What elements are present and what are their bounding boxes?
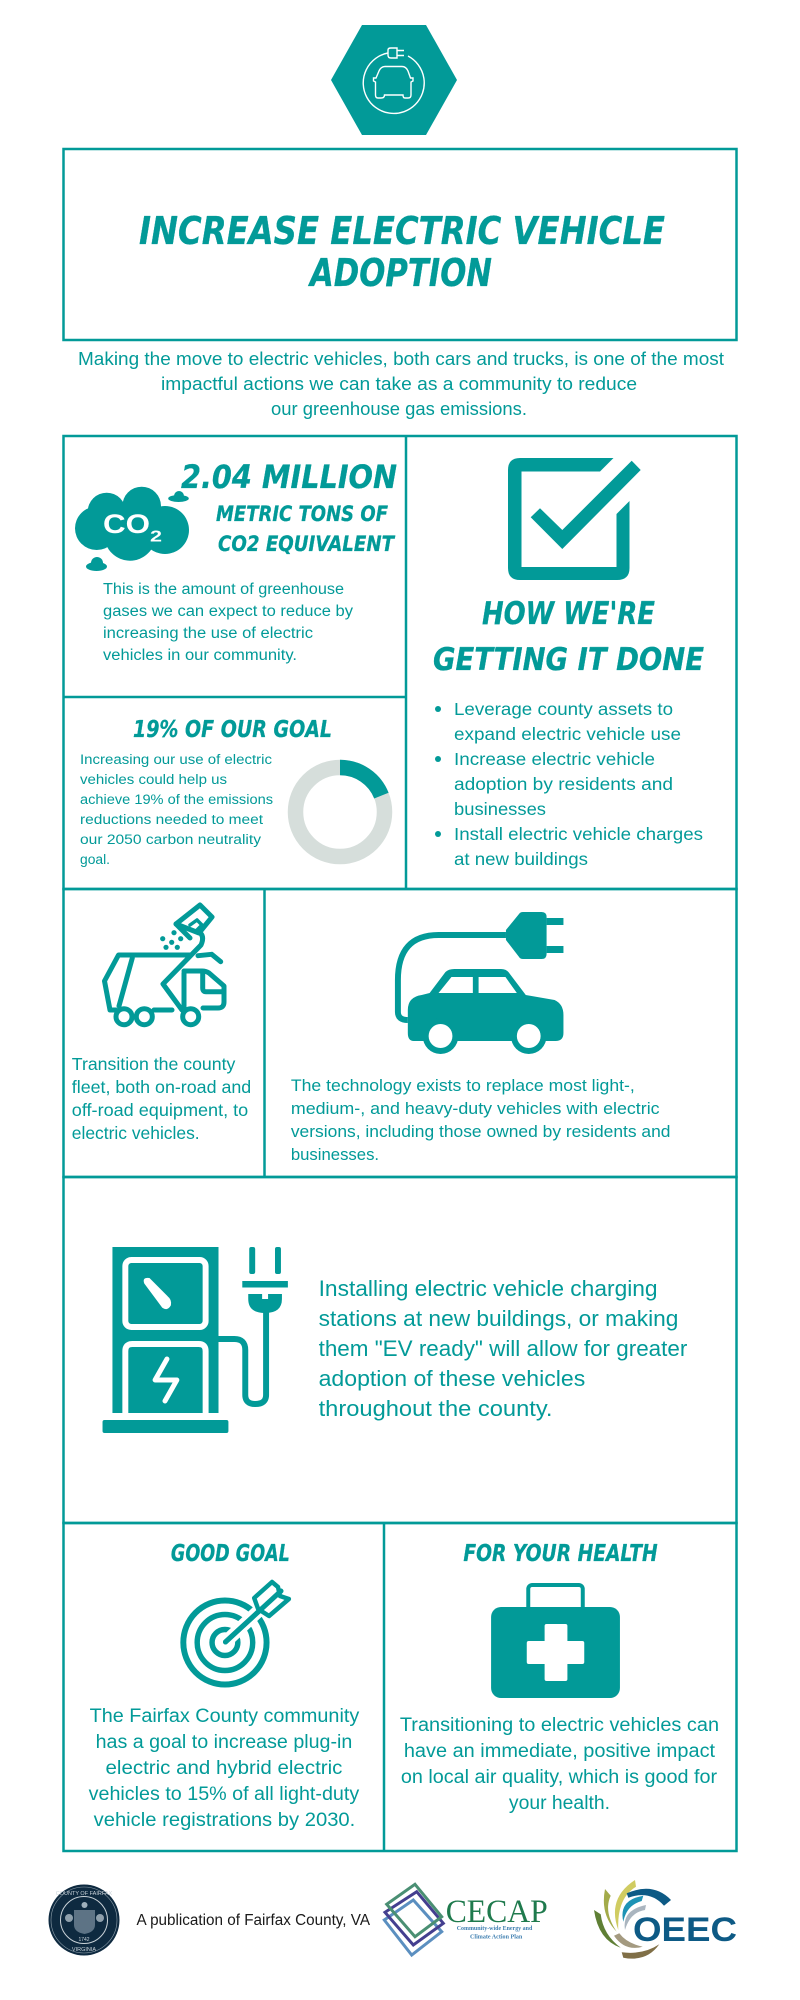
description: Transition the county <box>72 1054 236 1074</box>
icon: garbage truck <box>104 905 224 1025</box>
description: vehicles could help us <box>80 772 227 788</box>
title <box>139 209 665 295</box>
unit label <box>216 502 395 556</box>
logo: CECAP: Community-wide Energy and <box>457 1925 533 1932</box>
description <box>319 1276 688 1421</box>
footer logos <box>48 1880 737 1959</box>
description: have an immediate, positive impact <box>404 1740 716 1762</box>
description: increasing the use of electric <box>103 625 313 642</box>
logo: CECAP: Climate Action Plan <box>470 1933 523 1940</box>
unit label: METRIC TONS OF <box>216 502 389 526</box>
icon: charging station <box>103 1247 288 1433</box>
icon: hexagon with electric car <box>331 25 457 135</box>
icon: CO2 cloud: 2 <box>150 528 162 546</box>
big number: 2.04 MILLION <box>181 458 397 496</box>
description: adoption of these vehicles <box>319 1366 585 1391</box>
bullet list: Install electric vehicle charges <box>454 824 703 844</box>
unit label: CO2 EQUIVALENT <box>218 532 395 556</box>
intro text: impactful actions we can take as a community to reduce <box>161 373 637 394</box>
bullet list: businesses <box>454 799 546 819</box>
heading: FOR YOUR HEALTH <box>463 1541 658 1567</box>
description: Transitioning to electric vehicles can <box>400 1714 719 1736</box>
description <box>103 581 353 664</box>
description: stations at new buildings, or making <box>319 1306 678 1331</box>
logo: CECAP: CECAP <box>446 1894 548 1930</box>
panel: for your health <box>400 1541 719 1814</box>
logo: Fairfax County seal: VIRGINIA <box>72 1947 96 1953</box>
panel: charging stations <box>103 1247 688 1433</box>
heading: 19% OF OUR GOAL <box>133 717 332 743</box>
icon: plugged-in car <box>398 912 563 1054</box>
description: fleet, both on-road and <box>72 1077 251 1097</box>
logo: CECAP <box>384 1884 548 1955</box>
panel: 19% of our goal <box>80 717 384 868</box>
icon: CO2 cloud <box>75 487 189 571</box>
heading <box>433 596 704 678</box>
logo: OEEC <box>594 1880 737 1959</box>
icon: target with arrow <box>183 1582 289 1684</box>
description: This is the amount of greenhouse <box>103 581 344 598</box>
bullet list: Leverage county assets to <box>454 699 673 719</box>
icon: first aid kit <box>491 1585 620 1698</box>
logo: Fairfax County seal: 1742 <box>78 1937 90 1943</box>
description <box>80 752 273 868</box>
description: has a goal to increase plug-in <box>96 1731 352 1753</box>
intro text: Making the move to electric vehicles, both cars and trucks, is one of the most <box>78 348 724 369</box>
bullet list <box>435 699 703 869</box>
description: them "EV ready" will allow for greater <box>319 1336 688 1361</box>
description: gases we can expect to reduce by <box>103 603 353 620</box>
icon: CO2 cloud: CO <box>103 509 150 539</box>
description: businesses. <box>291 1145 379 1164</box>
description: your health. <box>509 1792 610 1814</box>
description: medium-, and heavy-duty vehicles with electric <box>291 1099 660 1118</box>
panel: county fleet <box>72 905 251 1143</box>
description: Installing electric vehicle charging <box>319 1276 658 1301</box>
description: electric vehicles. <box>72 1123 200 1143</box>
description: on local air quality, which is good for <box>401 1766 718 1788</box>
description <box>400 1714 719 1814</box>
description: vehicles in our community. <box>103 647 297 664</box>
description: achieve 19% of the emissions <box>80 792 273 808</box>
description: vehicles to 15% of all light-duty <box>89 1783 360 1805</box>
bullet list: adoption by residents and <box>454 774 673 794</box>
icon: checkbox <box>508 458 641 580</box>
panel: title box <box>64 149 736 340</box>
donut chart 19% <box>296 768 384 856</box>
description: off-road equipment, to <box>72 1100 248 1120</box>
panel: 2.04 million metric tons <box>75 458 397 664</box>
panel: good goal <box>89 1541 360 1831</box>
logo: OEEC: OEEC <box>633 1911 737 1949</box>
description <box>72 1054 251 1143</box>
heading: GOOD GOAL <box>171 1541 290 1567</box>
intro text <box>78 348 724 419</box>
heading: HOW WE'RE <box>482 596 655 632</box>
title: INCREASE ELECTRIC VEHICLE <box>139 209 665 253</box>
description: The technology exists to replace most light-, <box>291 1076 635 1095</box>
description: electric and hybrid electric <box>106 1757 343 1779</box>
description: vehicle registrations by 2030. <box>94 1809 355 1831</box>
description: throughout the county. <box>319 1396 553 1421</box>
description: reductions needed to meet <box>80 812 263 828</box>
description: our 2050 carbon neutrality <box>80 832 262 848</box>
intro text: our greenhouse gas emissions. <box>271 398 527 419</box>
title: ADOPTION <box>308 251 492 295</box>
description <box>291 1076 670 1164</box>
bullet list: Increase electric vehicle <box>454 749 655 769</box>
panel grid frame <box>64 436 736 1851</box>
bullet list: expand electric vehicle use <box>454 724 681 744</box>
panel: how we're getting it done <box>433 458 704 869</box>
description: The Fairfax County community <box>90 1705 360 1727</box>
publication credit: A publication of Fairfax County, VA <box>136 1912 371 1929</box>
logo: Fairfax County seal: COUNTY OF FAIRFAX <box>56 1891 113 1897</box>
bullet list: at new buildings <box>454 849 588 869</box>
description: Increasing our use of electric <box>80 752 272 768</box>
description: goal. <box>80 852 110 868</box>
heading: GETTING IT DONE <box>433 642 704 678</box>
panel: technology exists <box>291 912 670 1164</box>
description: versions, including those owned by residents and <box>291 1122 670 1141</box>
description <box>89 1705 360 1831</box>
logo: Fairfax County seal <box>48 1884 120 1956</box>
